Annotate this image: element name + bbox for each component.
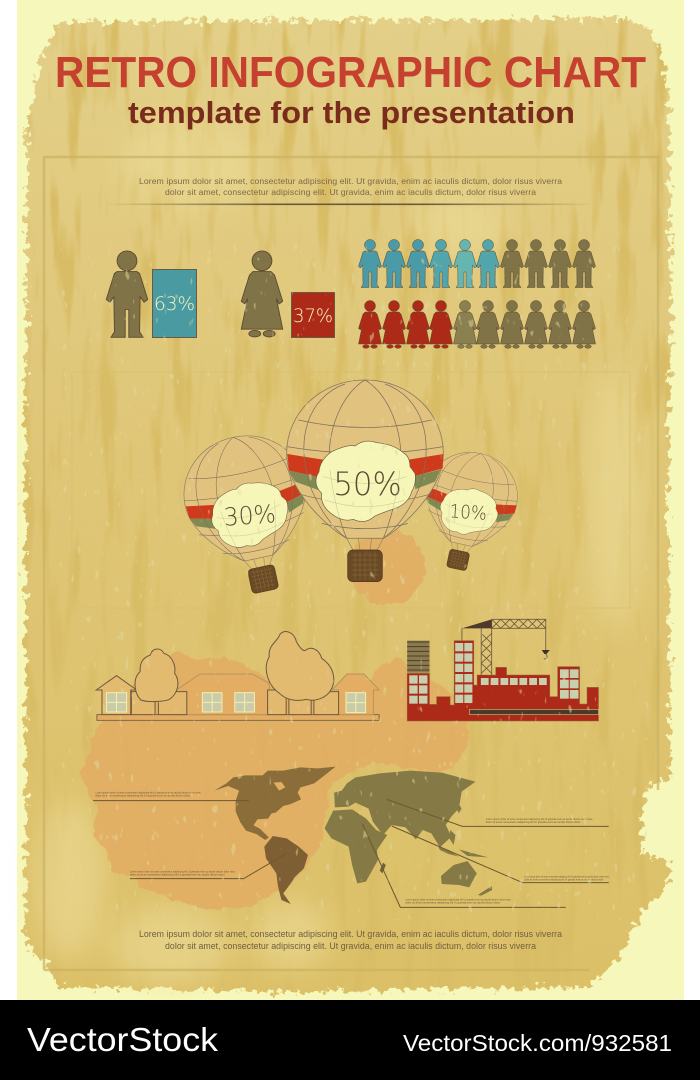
intro text: [139, 176, 562, 197]
australia: [441, 861, 477, 887]
north america: [214, 767, 336, 840]
watermark id: VectorStock.com/932581: [403, 1030, 672, 1056]
factory illustration: [407, 619, 598, 721]
islands: [438, 800, 488, 857]
icon: man: [106, 251, 148, 337]
worn speckle overlay: [60, 240, 650, 920]
hudson bay: [274, 782, 285, 791]
balloon 10%: [411, 444, 526, 578]
orange stains: [80, 529, 470, 910]
striped tower: [407, 641, 429, 673]
pale worn patches: [35, 120, 643, 985]
pictogram row: women: [358, 300, 596, 348]
callout captions: Lorem ipsum dolor sit amet consectetur adipiscing elit Ut gravida enim ac iaculis dictum dolor risus: [405, 898, 511, 902]
callout captions: dolor sit amet consectetur adipiscing elit Ut gravida enim ac iaculis dictum dolor: [405, 901, 500, 905]
watermark bar: [0, 1000, 700, 1080]
intro divider: [105, 204, 595, 205]
pictogram row: men: [358, 240, 596, 288]
callout captions: dolor sit amet consectetur adipiscing elit Ut gravida enim ac iaculis dictum dolor: [486, 820, 581, 824]
balloon 30%: 30%: [223, 499, 277, 532]
fences: [131, 690, 339, 715]
factory windows: [409, 643, 579, 704]
africa: [325, 809, 387, 883]
red factory silhouette: [407, 641, 598, 721]
balloon 50%: [287, 380, 443, 582]
balloon 10%: 10%: [449, 501, 487, 525]
callout captions: dolor sit amet consectetur adipiscing elit Ut gravida enim ac iaculis dictum dolor: [95, 793, 190, 797]
left house: [96, 676, 137, 715]
new zealand: [478, 886, 492, 896]
red bar 37%: [292, 292, 334, 338]
value 37%: 37%: [293, 305, 333, 327]
footer text: Lorem ipsum dolor sit amet, consectetur adipiscing elit. Ut gravida, enim ac iaculis dictum, dolor risus viverra: [139, 929, 562, 939]
intro text: dolor sit amet, consectetur adipiscing elit. Ut gravida, enim ac iaculis dictum, dolor risus viverra: [165, 187, 536, 197]
windows: [106, 693, 366, 713]
female statistic: [241, 251, 334, 338]
teal bar 63%: [152, 270, 196, 338]
callout captions: [95, 790, 609, 905]
subtitle: template for the presentation: [128, 95, 575, 130]
balloon 30%: [173, 425, 325, 604]
callout captions: Lorem ipsum dolor sit amet consectetur adipiscing elit Ut gravida enim ac iaculis dictum dolor risus: [486, 817, 593, 821]
callout captions: Lorem ipsum dolor sit amet consectetur adipiscing elit Ut gravida enim ac iaculis dictum dolor risus: [524, 874, 609, 878]
balloon 50%: 50%: [333, 467, 402, 503]
title: RETRO INFOGRAPHIC CHART: [55, 48, 646, 97]
callout captions: Lorem ipsum dolor sit amet consectetur adipiscing elit Ut gravida enim ac iaculis dictum dolor risus: [95, 790, 201, 794]
crane hook block: [542, 650, 550, 654]
balloon chart: [173, 380, 526, 604]
conveyor bar: [469, 709, 598, 715]
inner frame: [44, 157, 658, 970]
footer text: dolor sit amet, consectetur adipiscing elit. Ut gravida, enim ac iaculis dictum, dolor risus viverra: [165, 941, 536, 951]
crane: [462, 619, 547, 675]
black band: [0, 1000, 700, 1080]
icon: woman: [241, 251, 283, 337]
world map: [93, 767, 609, 907]
value 63%: 63%: [154, 293, 195, 315]
right house: [332, 674, 379, 715]
callout captions: dolor sit amet consectetur adipiscing elit Ut gravida enim ac iaculis dictum dolor: [130, 872, 225, 876]
callout captions: Lorem ipsum dolor sit amet consectetur adipiscing elit Ut gravida enim ac iaculis dictum dolor risus: [130, 869, 236, 873]
central house: [176, 674, 269, 715]
section dividers: [72, 372, 630, 608]
eurasia: [334, 771, 475, 847]
tree right: [266, 632, 334, 700]
callout captions: dolor sit amet consectetur adipiscing elit Ut gravida enim ac iaculis dictum dolor: [524, 877, 604, 881]
crane counterweight: [462, 619, 492, 628]
south america: [264, 836, 308, 904]
intro text: Lorem ipsum dolor sit amet, consectetur adipiscing elit. Ut gravida, enim ac iaculis dictum, dolor risus viverra: [139, 176, 562, 186]
male statistic: [106, 251, 196, 338]
watermark logo: VectorStock: [27, 1021, 219, 1058]
madagascar: [380, 863, 386, 873]
footer text: [139, 929, 562, 951]
houses illustration: [96, 632, 379, 720]
tree left: [135, 649, 178, 702]
callout lines: [93, 799, 609, 907]
ground strip: [97, 715, 379, 720]
